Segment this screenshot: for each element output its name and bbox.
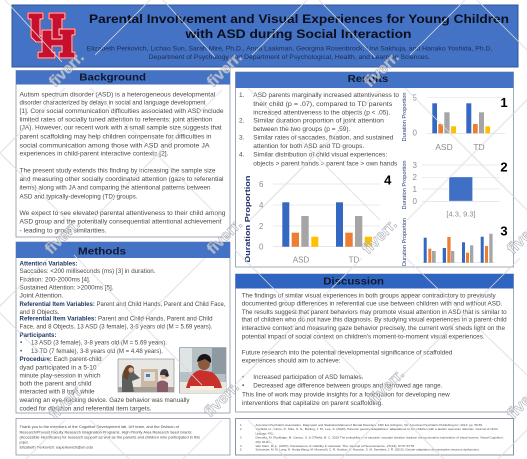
chart 4: Duration Proportion [243,175,252,262]
photo: child at table [180,348,226,393]
discussion text: This line of work may provide insights for a foundation for developing new [242,392,450,399]
poster title: Parental Involvement and Visual Experiences for Young Children [89,14,509,26]
discussion text: potential impact of social context on children's moment-to-moment visual experiences. [242,333,485,340]
background text: ASD and typically-developing (TD) groups. [20,194,138,201]
watermark overlay: fiverr. [204,49,246,91]
chart 4: 4 [384,172,392,188]
references text: Van Dam, R. L. (2007). Persistence of visibility in saccade: The Journal of Neuroscience, 27(24), 6747-6778. [256,444,415,448]
discussion text: • [242,374,244,381]
chart 4 [243,172,392,264]
chart 2: 0 [412,197,418,206]
panel: background [16,70,230,237]
acknowledgements text: Thank you to the members of the Cognitive Development lab, UH team, and the Division of [20,425,179,429]
poster title [89,14,509,41]
chart 1: Duration Proportion [402,92,408,142]
chart 1: TD [473,142,485,152]
methods text: 13 TD (7 female), 3-8 years old (M = 4.48 years). [31,348,163,355]
results list: Similar duration proportion of joint attention [253,117,384,124]
references text: Language, 47(1). [256,431,274,435]
references text: Yoshida, H., Cirino, P., Mire, S. S., Burling, J. M., Lee, S. (2020). Parents' gesture adaptations: adaptations to CG children with a autism spectrum disorder. Journal of Child [256,427,498,431]
chart 4: 2 [259,222,264,231]
references text: 26(5), 333-343. [256,440,270,444]
results list [239,92,399,167]
acknowledgements text: project. [20,440,28,444]
background text: (JA). However, our recent work with a small sample size suggests that [20,125,222,132]
results list: Similar rates of saccades, fixation, and sustained [253,134,394,141]
methods text: Participants: [20,332,56,339]
results list: increased attentiveness to the objects (p < .05). [253,109,391,116]
chart 4: 6 [259,180,264,189]
chart 1: 0 [412,128,418,138]
methods text: Fixation: 200-2000ms [4]. [20,276,91,283]
heading: methods: Methods [78,246,127,258]
background text: ASD group and the potentially consequential attentional achievement [20,219,222,226]
watermark overlay: fiverr. [46,381,88,423]
results list: 2. [239,117,245,124]
methods text: dyad participated in a 5-10 [20,364,97,371]
background text: items) along with JA and comparing the attentional patterns between [20,185,211,192]
methods text [19,260,226,412]
methods text: 13 ASD (3 female), 3-8 years old (M = 5.69 years). [31,340,167,347]
chart 3 [402,218,508,266]
background text: social communication among those with ASD and promote JA [20,142,210,149]
discussion text: documented group differences in referential cue use between children with and without ASD. [242,301,503,308]
methods text: • [20,340,22,347]
background text: [1]. Core social communication difficulties associated with ASD include [20,108,224,115]
watermark overlay: fiverr. [204,216,246,258]
chart 2: 2 [412,173,418,182]
chart 3: 3 [500,224,508,238]
results list: 1. [239,92,245,99]
results list: attention for both ASD and TD groups. [253,143,365,150]
background text: We expect to see elevated parental attentiveness to their child among [20,210,226,217]
references text [240,423,504,452]
chart 3: Duration Proportion [402,218,408,266]
panel: acknowledgements [16,418,230,455]
background text: disorder characterized by delays in social and language development [20,100,206,107]
references text: 1. [240,423,243,427]
authors and affiliation: Department of Psychology and Department of Psychological, Health, and Learning Sciences. [149,55,430,61]
discussion text: Increased participation of ASD females. [253,374,364,381]
methods text: wearing an eye-tracking device. Gaze behavior was manually [19,397,190,404]
references text: 3. [240,435,243,439]
discussion text: interactive context and measuring gaze behavior precisely, the current work sheds light on the [242,325,505,332]
authors and affiliation [87,46,493,61]
results list: between the two groups (p = .59). [253,126,351,133]
panel: discussion [236,274,514,412]
methods text: Saccades: <200 milliseconds (ms) [3] in duration. [20,268,156,275]
panel: results [236,72,514,267]
chart 2: Duration Proportion [402,160,408,210]
watermark overlay: fiverr. [201,379,243,421]
chart 2: 2 [500,160,508,174]
chart 1: 5 [412,94,418,102]
methods text: both the parent and child [20,381,92,388]
results list: Similar distribution of child visual experiences: [253,151,388,158]
references text: 2. [240,427,243,431]
discussion text: • [242,382,244,389]
methods text: Joint Attention. [20,293,64,300]
watermark overlay: fiverr. [42,216,84,258]
chart 2: 3 [412,161,418,170]
authors and affiliation: Elizabeth Perkovich, Lichao Sun, Sarah Mire, Ph.D., Anna Laakman, Georgina Rosenbrock, Urvi Sakhuja, and Hanako Yoshida, Ph.D. [87,46,493,52]
background text: parent scaffolding may help children compensate for difficulties in [20,133,212,140]
discussion text: experiences should aim to achieve: [242,358,341,365]
methods text: minute play-session in which [20,372,101,379]
methods text: and 8 Objects. [20,309,60,316]
results list: 4. [239,151,245,158]
background text: and measuring other socially coordinated attention (gaze to referential [20,176,224,183]
background text: experiences in child-parent interactive contexts [2]. [20,151,169,158]
results list: ASD parents marginally increased attentiveness to [253,92,399,99]
poster title: with ASD during Social Interaction [184,29,412,41]
heading: discussion: Discussion [323,276,384,287]
references text: 5. [240,448,243,452]
watermark overlay: fiverr. [359,216,401,258]
acknowledgements text [20,425,200,450]
heading: results: Results [348,74,389,85]
heading: background: Background [79,73,146,84]
references text: American Psychiatric Association. Diagnostic and Statistical Manual of Mental Disorders, Fifth Ed. Arlington, VA: American Psychiatric Publishing Inc; 2013. pp. 50-59. [256,423,483,427]
methods text: coded for duration and referential item targets. [20,405,152,412]
discussion text: Future research into the potential developmental significance of scaffolded [242,350,453,357]
methods text: • [20,348,22,355]
results list: 3. [239,134,245,141]
methods text: Face, and 8 Objects. 13 ASD (3 female), 3-8 years old (M = 5.69 years). [20,324,213,331]
methods text: Procedure: Each parent-child [20,356,102,363]
chart 1 [402,92,508,152]
chart 4: ASD [293,255,309,264]
panel: methods [16,242,230,413]
discussion text: The findings of similar visual experiences in both groups appear contradictory to previously [242,292,496,299]
background text [20,91,226,235]
references text: 4. [240,444,243,448]
discussion text: that of children who do not have this diagnosis. By studying visual experiences in a parent-child [242,317,507,324]
watermark overlay: fiverr. [46,49,88,91]
methods text: Sustained Attention: >2000ms [5]. [20,284,114,291]
acknowledgements text: (Accessible Healthcare) for research support as well as the parents and children who participated in this [20,435,200,439]
discussion text: The results suggest that parent behaviors may promote visual attention in ASD that is similar to [242,309,507,316]
discussion text: interventions that capitalize on parent scaffolding. [242,400,383,407]
results list: their child (p = .07), compared to TD parents [253,101,392,108]
chart 2: 1 [412,185,418,194]
acknowledgements text: Elizabeth Perkovich: eaperkovich@uh.edu [20,446,93,450]
acknowledgements text: Research/Provost Faculty Research Imagination Programs, High Priority Area Research Seed Grants [20,430,192,434]
panel: references [236,418,514,455]
methods text: Referential Item Variables: Parent and Child Hands, Parent and Child Face, [20,301,226,308]
background text: The present study extends this finding by increasing the sample size [20,167,216,174]
chart 2: [4.3, 9.3] [446,210,476,218]
discussion text: Decreased age difference between groups and narrowed age range. [253,382,443,389]
chart 4: 0 [259,242,264,252]
background text: Autism spectrum disorder (ASD) is a heterogeneous developmental [20,91,215,98]
background text: - leading to group similarities. [20,228,107,235]
watermark overlay: fiverr. [366,366,408,408]
photo: parent and child playing [118,359,174,392]
discussion text [242,292,507,407]
references text: Dematte, M. Rucklidge, M. Carson, S. & O'Reilly, M. C. 2019 The probability of of saccade: saccade duration duration during dynamic exploration of visual scenes. Visual Cognition, [256,435,504,439]
references text: Schroeder, M. M. Lang, N. Hurtig Wang, M. Mounsolli, C. R. Hudson, K. Houston, S. M. Seedsley, J. R. (2013). Gender adaptation discriminative resource dysfunction. [256,448,480,452]
methods text: Attention Variables: [20,260,78,267]
title banner [12,5,518,67]
results list: objects > parent hands > parent face > own hands [253,160,397,167]
icon: university logo [28,13,75,58]
chart 2 [402,160,508,218]
chart 4: 4 [259,201,264,210]
chart 1: ASD [435,142,453,152]
watermark overlay: fiverr. [361,49,403,91]
chart 1: 1 [500,95,508,110]
methods text: interacted with 8 toys while [20,389,95,396]
methods text: Referential Item Variables: Parent and Child Hands, Parent and Child [20,315,213,322]
background text: limited rates of socially tuned attention to referents: joint attention [20,116,213,123]
chart 4: TD [349,255,360,264]
